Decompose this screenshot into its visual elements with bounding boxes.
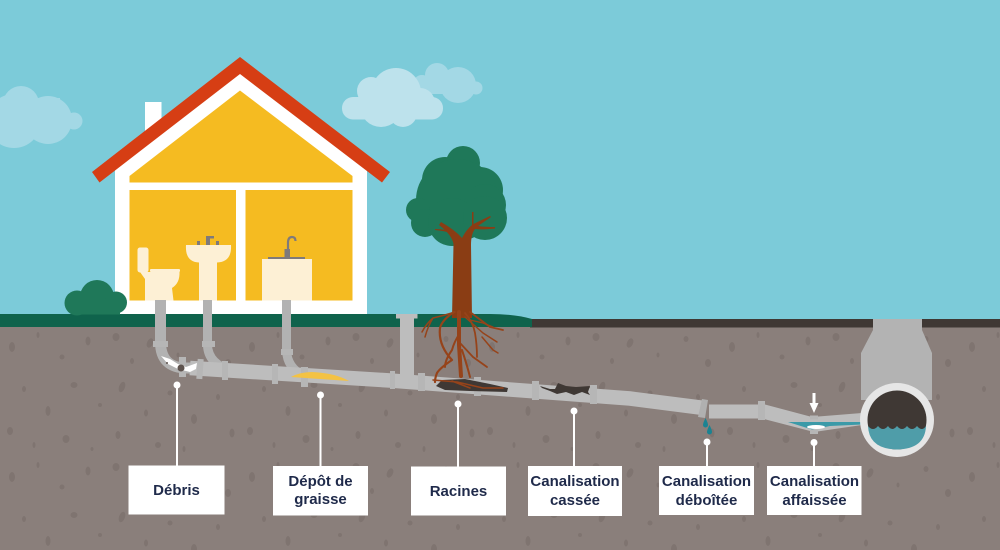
label: débris: Débris: [153, 482, 200, 499]
label: canalisation cassée: cassée: [550, 492, 600, 509]
icon: toilet: [138, 248, 180, 300]
label: canalisation affaissée: affaissée: [782, 492, 847, 509]
walls: [115, 70, 367, 314]
manhole: [860, 319, 934, 457]
asphalt road: [530, 319, 1000, 328]
grease deposit: [291, 372, 349, 381]
roots in the pipe: [422, 312, 508, 392]
branch twig: [435, 229, 455, 234]
pipe run to break: [190, 368, 704, 408]
water drops: [703, 418, 712, 434]
roof: [92, 57, 390, 182]
vent pipe: [396, 314, 418, 378]
grass: [0, 314, 532, 327]
house: [92, 57, 390, 314]
sky: [0, 0, 1000, 330]
label: canalisation déboîtée: déboîtée: [676, 492, 737, 509]
label: canalisation affaissée: Canalisation: [770, 473, 859, 490]
bush: [64, 280, 127, 316]
sagging section water: [788, 422, 862, 430]
joint after offset: [758, 401, 765, 420]
label: racines: [411, 400, 506, 516]
left room: [130, 190, 236, 300]
label: canalisation déboîtée: Canalisation: [662, 473, 751, 490]
sewer water: [868, 426, 926, 450]
label: dépôt de graisse: Dépôt de: [288, 473, 353, 490]
trunk: [439, 212, 495, 318]
offset pipe end: [698, 399, 708, 418]
label: dépôt de graisse: graisse: [294, 491, 347, 508]
sewer main interior: [868, 390, 926, 450]
main sewer pipe: [160, 300, 704, 408]
sewer main outer ring: [860, 383, 934, 457]
debris blockage: [161, 356, 197, 372]
canopy: [406, 146, 507, 246]
pipe after the offset joint: [709, 404, 862, 432]
cloud: left: [0, 86, 82, 148]
collapse highlight: [807, 425, 825, 429]
label: canalisation cassée: Canalisation: [530, 473, 620, 490]
icon: kitchen sink: [262, 237, 312, 300]
chimney: [145, 102, 162, 142]
label: canalisation cassée: [528, 408, 622, 516]
sink branch: [208, 300, 232, 371]
cloud: front right: [342, 68, 443, 127]
label: canalisation déboîtée: [659, 438, 754, 515]
collapsed pipe joints: [810, 416, 818, 434]
pipe joints: [153, 341, 597, 404]
label: dépôt de graisse: [273, 392, 368, 516]
ground: [0, 326, 1000, 550]
label: canalisation affaissée: [767, 439, 862, 515]
attic: [130, 90, 352, 182]
right room: [246, 190, 352, 300]
arrow: collapse: [810, 393, 818, 413]
tree: [406, 146, 507, 318]
cloud: back right: [413, 63, 482, 103]
icon: pedestal sink: [186, 236, 231, 300]
label: racines: Racines: [430, 483, 487, 500]
broken pipe crack: [540, 383, 590, 395]
kitchen branch: [286, 300, 304, 376]
label: débris: [128, 382, 224, 514]
toilet branch: [160, 300, 197, 368]
